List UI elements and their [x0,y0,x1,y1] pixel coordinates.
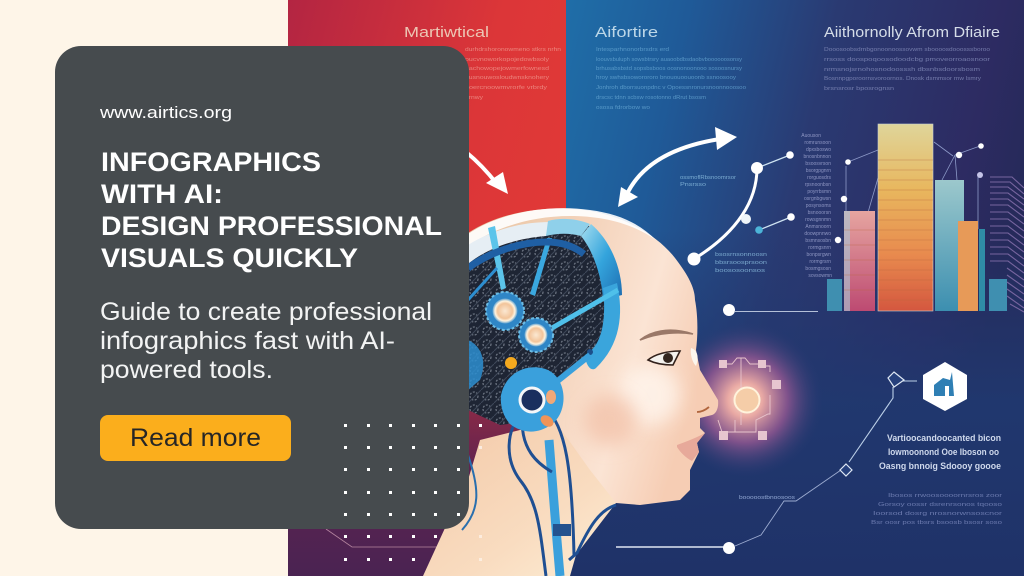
nostril [697,407,709,412]
blue panel body text one: Intesparhnonorbrsdrs erd [596,47,669,53]
blue panel body text one [596,47,746,111]
read more button: Read more [130,424,261,452]
right caption body: Bsr oosr pos tbsrs bsoosb bsosr soso [871,520,1002,526]
red panel body text: ernwy [465,95,484,101]
chart side text: bonpsrgwn [807,252,831,258]
chart side text: bsnooorsn [808,210,831,216]
description [100,298,432,384]
description: Guide to create professional [100,298,432,326]
collar [569,505,616,560]
mechanical brain [468,219,622,425]
white skull band [468,208,656,246]
right caption bold: Vartioocandoocanted bicon [887,433,1001,443]
head: cheek highlight [620,365,680,425]
chart side text: osrgnbgwsn [804,196,831,202]
red panel body text: uusnouwosloudwnsknohery [465,75,550,81]
chart side text [801,133,832,279]
headline: DESIGN PROFESSIONAL [101,211,442,241]
headline [101,147,442,273]
eye far side [691,348,698,366]
blue panel body text two: rrsoss doospoqoosodoodcbg pmoveorroaosnoor [824,57,990,63]
wires [462,408,574,576]
chart side text: bsorgpgnrn [806,168,831,174]
iris [663,353,673,363]
blue panel body text one: loouvsbuluph sowsbtrsry auaoobdbsdaobvboooooosonsy [596,57,743,63]
red panel body text: eoercnoowmvrorfe vrbrdy [465,85,548,91]
chart side text: rowsgnnmn [805,217,831,223]
red panel heading: Martiwtical [404,24,489,41]
baseline axis with node [723,304,818,316]
blue panel body text two: Dooosoobsdrnbgonoonoossovwm sboooosdooosssboroo [824,47,990,53]
chart side text: sovsowmn [808,273,832,279]
head: cheek blush [584,394,636,446]
headline: VISUALS QUICKLY [101,243,358,273]
glowing circuit [667,322,823,478]
chart side text: rorguosdrs [807,175,831,181]
blue panel body text one: ososa fdrorbow wo [596,105,650,111]
dot grid [344,424,482,561]
blue panel body text two: Bosnnpgporoornsvoroornos. Dnosk dsmmsor rnw lsmry [824,76,981,82]
headline: WITH AI: [101,179,223,209]
network labels: Pnsrsso [680,182,706,188]
ear unit [501,355,590,432]
bar chart [827,124,1024,312]
head: neck [423,420,640,576]
blue panel body text two: brsnsrosr bposrognsn [824,86,894,92]
cream background [0,0,290,576]
lower line with node [616,470,841,554]
right caption bold: Oasng bnnoig Sdoooy goooe [879,461,1001,471]
chart side text: doowpnnwo [804,231,831,237]
headline: INFOGRAPHICS [101,147,321,177]
blue panel heading two: Aiithornolly Afrom Dfiaire [824,24,1000,41]
blue panel body text one: hroy swhsbsoworororo bnououoouoonb ssnoosooy [596,75,737,81]
network labels: boososoonsos [715,268,766,274]
chart side text: poyrrbsmn [807,189,831,195]
blue panel body text one: brhusabsbstd sopsbsboos oosnonoonooo sosoosnursy [596,66,743,72]
blue panel body text one: drscsc tdnn scbsw rosotonno dRrut bsosm [596,95,706,101]
network labels: bbsrsoosprsoon [715,260,767,266]
lips [677,433,705,461]
chart side text: rormgsnrn [808,245,831,251]
chart side text: romrunsoon [804,140,831,146]
blue panel body text one: Jonhroh dborrsuonpdnc v Opoessnronursnoonnooosoo [596,85,746,91]
node network [680,151,795,274]
arrow: red panel [466,152,508,194]
brow [640,330,693,340]
blue panel body text two [824,47,990,92]
blue panel body text two: nrmsnojsrnohosnodoosssh dbsnbsdoorsbosm [824,67,981,73]
description: infographics fast with AI- [100,327,395,355]
red panel body text: oucvnoworkopojedowbsoly [465,57,550,63]
right caption body [871,493,1002,526]
striped area at right [990,177,1024,312]
chart side text: bosmgsosn [805,266,831,272]
blue panel heading one: Aifortire [595,24,658,41]
red panel body text [465,47,561,101]
facial features [640,330,709,461]
text panel [55,46,469,529]
diamond connector line [840,372,917,476]
blue panel [566,0,1024,576]
network labels: ossmoflRbsnoomrsor [680,175,736,181]
right caption body: Ibosos rrwoosoooornrsros zoor [888,493,1002,499]
right caption bold: Iowmoonond Ooe Iboson oo [888,447,999,457]
description: powered tools. [100,356,273,384]
chart side text: Anmsnoorn [805,224,831,230]
hexagon icon [923,362,967,411]
chart side text: posynsoms [806,203,831,209]
chart side text: dpxsboswo [806,147,831,153]
website: www.airtics.org [99,103,232,122]
right caption bold [879,433,1001,471]
chart side text: bsoosvrson [805,161,831,167]
right caption body: Gorsoy oossr dsrenrsonos tqooso [878,502,1002,508]
eye [648,351,680,365]
red panel body text: durhdrshoronowmeno stkrs nrhn [465,47,561,53]
network labels: bsosrnsonnoosn [715,252,767,258]
chart side text: bnosnbnnon [803,154,831,160]
read more button [100,415,291,461]
chart side text: rpsnoonbsn [805,182,831,188]
head: skull and face [468,208,718,505]
arrow: double curved [618,127,737,207]
red panel [288,0,567,576]
chart side text: rormgrsrn [809,259,831,265]
network labels [680,175,767,274]
right caption body: Ioorsod dosrg nrosnorwnsoscnor [873,511,1002,517]
chart side text: Auouson [801,133,821,139]
red panel body text: hachowopejowmerfownesd [465,66,549,72]
chart side text: bsmnsosbn [805,238,831,244]
small label bottom: booooostbnoosoos [739,495,796,501]
